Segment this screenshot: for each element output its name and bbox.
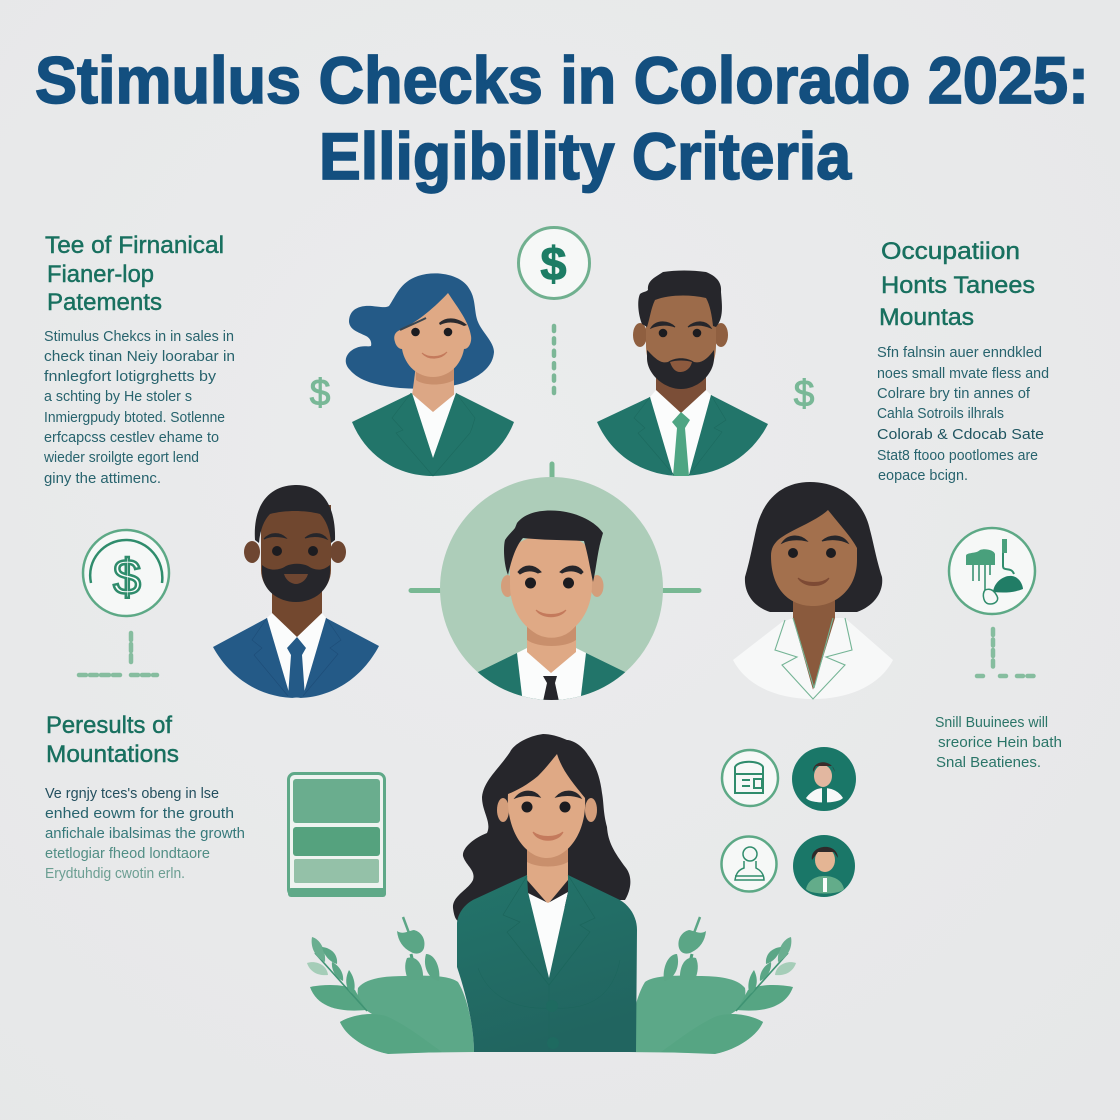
main woman's jacket [457,875,637,1052]
person: woman in white coat [733,482,893,699]
icon: avatar young man dark circle [793,835,855,897]
text block: top left: erfcapcss cestlev ehame to [44,429,219,446]
text block: bottom left: enhed eowm for the grouth [45,805,234,822]
icon: left dollar badge: $ [113,549,141,605]
central portrait: man in circle [411,464,699,710]
text block: bottom left: Erydtuhdig cwotin erln. [45,865,185,882]
text block: bottom right: Snal Beatienes. [936,754,1041,771]
text block: top right: Stat8 ftooo pootlomes are [877,447,1038,464]
text block: bottom left: Peresults of [46,712,172,739]
text block: top left: check tinan Neiy loorabar in [44,348,235,365]
text block: bottom right: sreorice Hein bath [938,734,1062,751]
icon: top dollar coin [518,228,590,298]
text block: top left: Tee of Firnanical [45,232,224,259]
text block: top left: Fianer-lop [47,261,154,288]
title: Stimulus Checks in Colorado 2025: [35,43,1089,117]
icon: small dollar right: $ [794,373,814,414]
text block: top right: Colrare bry tin annes of [877,385,1031,402]
text block: top left: Inmiergpudy btoted. Sotlenne [44,409,225,426]
text block: top left: wieder sroilgte egort lend [43,449,199,466]
title: Elligibility Criteria [319,119,852,193]
text block: bottom left [45,712,245,882]
icon: person badge [722,836,776,892]
text block: bottom left: etetlogiar fheod londtaore [45,845,210,862]
text block: top right: Mountas [879,304,974,331]
text block: top left: a schting by He stoler s [44,388,192,405]
icon: left dollar badge [83,530,169,616]
title [35,43,1089,193]
person: main woman [453,734,630,978]
text block: top left [43,232,235,487]
icon: clipboard bars [288,774,386,897]
text block: top left: fnnlegfort lotigrghetts by [44,368,217,385]
text block: bottom right [935,714,1062,771]
icon: avatar man dark circle [792,747,856,811]
illustration: leaves left [307,917,474,1054]
text block: bottom left: anfichale ibalsimas the growth [45,825,245,842]
illustration: leaves right [629,917,796,1054]
person: man in blue suit [213,485,379,698]
text block: top right: Sfn falnsin auer enndkled [877,344,1042,361]
icon: small dollar left: $ [310,372,330,413]
connector: left dashed [79,633,157,675]
text block: bottom left: Ve rgnjy tces's obeng in lse [45,785,219,802]
connector: top dashed line [552,326,556,397]
text block: top right: Cahla Sotroils ilhrals [877,405,1004,422]
person: woman with blue hair [346,273,514,476]
connector: right dashed [977,629,1034,676]
person: man with green tie [597,270,768,476]
text block: top right [877,238,1049,484]
text block: top right: eopace bcign. [878,467,968,484]
text block: top right: Occupatiion [881,238,1020,265]
text block: top left: Patements [47,289,162,316]
text block: top right: Colorab & Cdocab Sate [877,426,1044,443]
text block: top left: giny the attimenc. [44,470,161,487]
icon: top dollar coin: $ [540,237,567,290]
icon: right tools badge [949,528,1035,614]
text block: bottom right: Snill Buuinees will [935,714,1048,731]
text block: top right: noes small mvate fless and [877,365,1049,382]
icon: storefront badge [722,750,778,806]
text block: bottom left: Mountations [46,741,179,768]
text block: top right: Honts Tanees [881,272,1035,299]
text block: top left: Stimulus Chekcs in in sales in [44,328,234,345]
